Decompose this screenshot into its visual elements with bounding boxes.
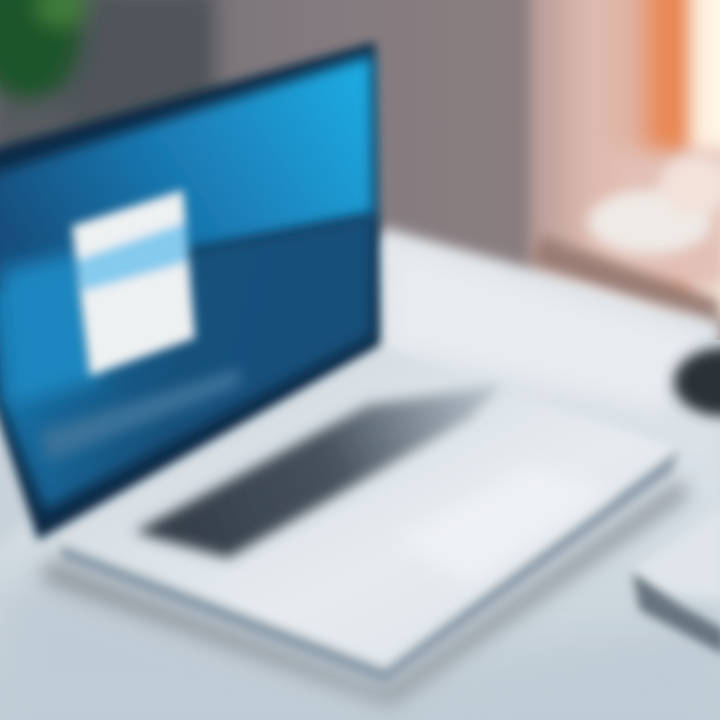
laptop base [55,348,678,684]
wall background [0,0,720,340]
keyboard [135,385,500,558]
screen lower-left glow [0,250,100,405]
trackpad [395,465,610,585]
desk surface [0,228,720,720]
window sill objects [530,155,720,335]
device at lower right [632,505,720,655]
screen lid [0,42,380,540]
dialog window [72,190,195,376]
dark object at right [674,348,720,416]
curtain and window [530,0,720,320]
plant [0,0,88,150]
screen upper area [0,55,374,290]
screen lower area [0,215,374,510]
taskbar strip [40,368,240,462]
laptop shadow [40,480,690,705]
